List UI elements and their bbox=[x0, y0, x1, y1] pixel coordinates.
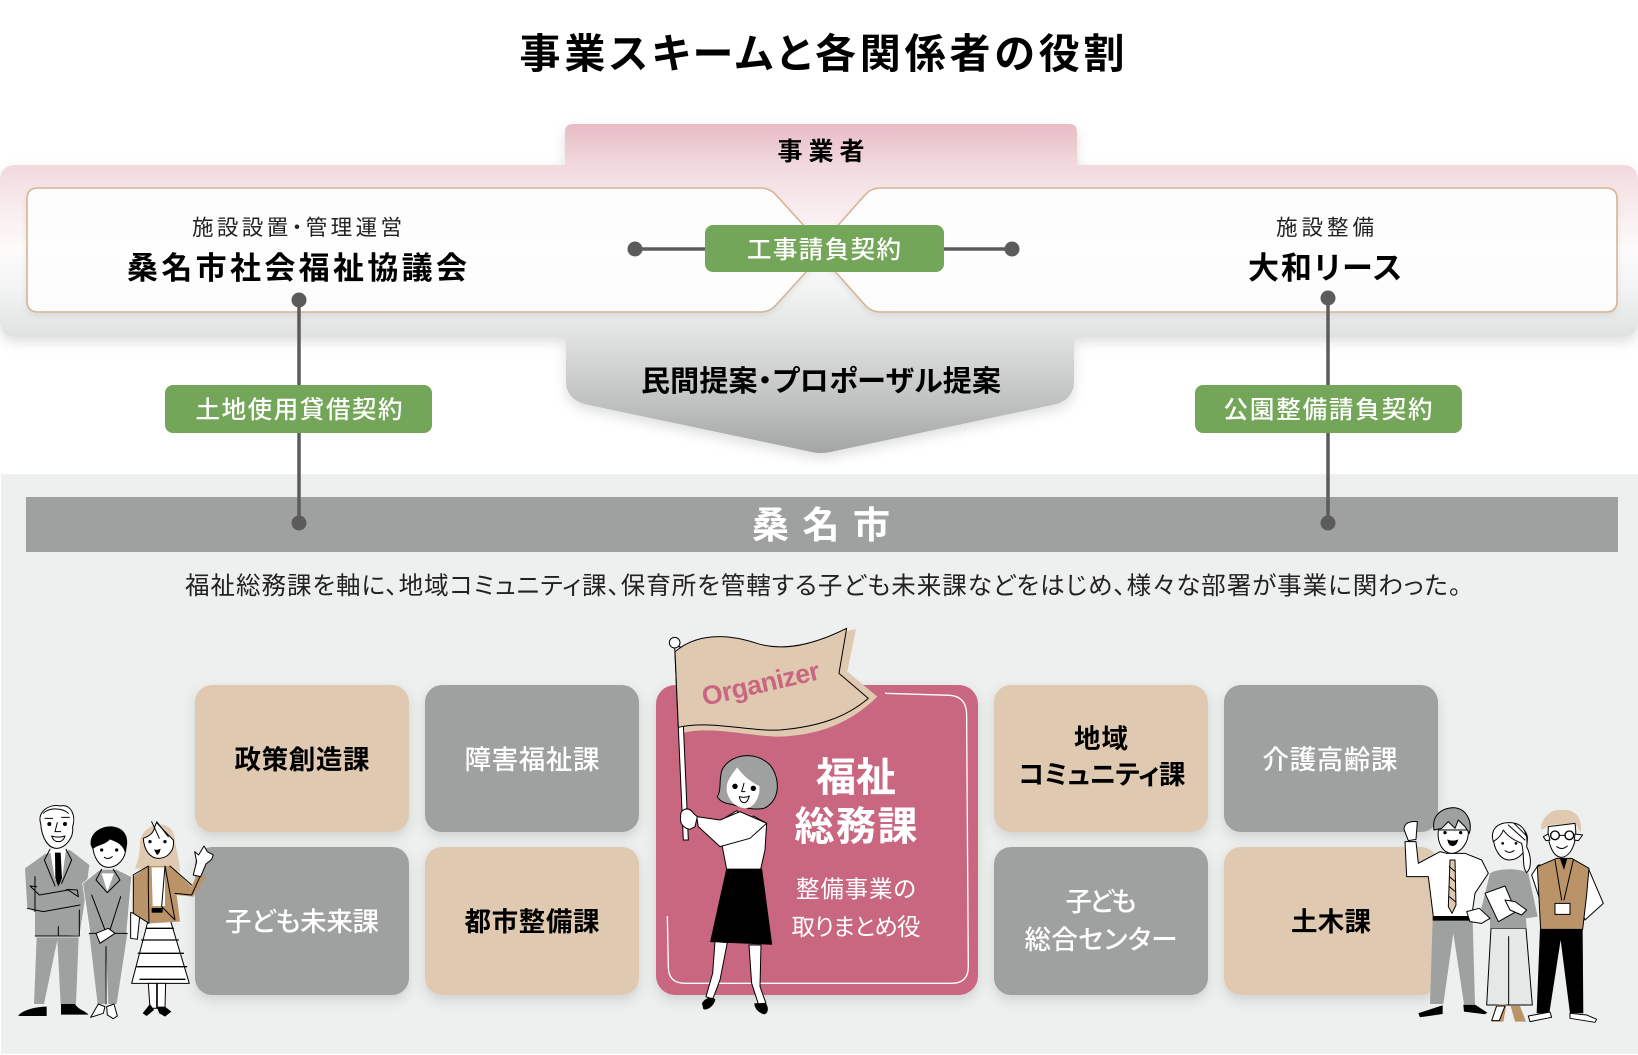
card: community: 地域 bbox=[1074, 724, 1128, 754]
connector: land lease contract bbox=[165, 292, 432, 530]
card: civil engineering: 土木課 bbox=[1291, 907, 1372, 937]
card: elderly care: 介護高齢課 bbox=[1262, 745, 1398, 775]
right woman bbox=[131, 822, 213, 1017]
card: community bbox=[994, 685, 1208, 832]
band background with tab and arrow bbox=[0, 124, 1638, 453]
man with vest bbox=[1528, 810, 1603, 1022]
panel: Kuwana city section bbox=[1, 474, 1638, 1054]
card subtitle line 1: 整備事業の bbox=[796, 876, 916, 902]
heading: operators: 事業者 bbox=[778, 138, 864, 166]
card: elderly care bbox=[1224, 685, 1438, 832]
flag text: Organizer bbox=[699, 656, 823, 712]
role label right: 施設整備 bbox=[1276, 216, 1374, 240]
city header bar bbox=[26, 497, 1618, 552]
panel: operators band bbox=[0, 124, 1638, 453]
card: general welfare affairs bbox=[656, 685, 978, 995]
contract label: 工事請負契約 bbox=[747, 236, 901, 264]
illustration: three staff on right bbox=[1404, 808, 1603, 1022]
card: disability welfare bbox=[425, 685, 639, 832]
contract label: 土地使用貸借契約 bbox=[196, 396, 402, 424]
card: children's centre bbox=[994, 847, 1208, 995]
illustration: organizer woman with flag bbox=[669, 628, 877, 1014]
card heading line 1: 福祉 bbox=[816, 756, 896, 800]
inner outline bbox=[667, 693, 968, 983]
middle woman bbox=[83, 826, 132, 1019]
card subtitle line 2: 取りまとめ役 bbox=[792, 914, 920, 940]
card: community: コミュニティ課 bbox=[1018, 760, 1186, 790]
card: disability welfare: 障害福祉課 bbox=[464, 745, 600, 775]
connector: construction contract bbox=[628, 225, 1020, 272]
woman with notebook bbox=[1467, 823, 1538, 1022]
connector: park contract bbox=[1195, 290, 1462, 530]
card: civil engineering bbox=[1224, 847, 1438, 995]
organisation name left: 桑名市社会福祉協議会 bbox=[127, 251, 467, 286]
card: children's future: 子ども未来課 bbox=[225, 907, 379, 937]
role label left: 施設設置・管理運営 bbox=[192, 216, 402, 240]
illustration: three staff on left bbox=[18, 805, 213, 1019]
proposal label: 民間提案・プロポーザル提案 bbox=[641, 365, 1001, 398]
man raising fist bbox=[1404, 808, 1488, 1017]
card: children's future bbox=[195, 847, 409, 995]
title: 事業スキームと各関係者の役割 bbox=[520, 31, 1124, 77]
card: policy creation bbox=[195, 685, 409, 832]
card: urban development: 都市整備課 bbox=[464, 907, 600, 937]
card: urban development bbox=[425, 847, 639, 995]
card: children's centre: 総合センター bbox=[1024, 925, 1178, 955]
box: welfare council bbox=[27, 188, 826, 312]
city name: 桑名市 bbox=[752, 505, 890, 546]
left man bbox=[18, 805, 89, 1016]
card: policy creation: 政策創造課 bbox=[234, 745, 370, 775]
organisation name right: 大和リース bbox=[1248, 251, 1402, 286]
contract label: 公園整備請負契約 bbox=[1224, 396, 1432, 424]
box: Yamato Lease bbox=[816, 188, 1617, 312]
card: children's centre: 子ども bbox=[1066, 887, 1136, 917]
description text: 福祉総務課を軸に、地域コミュニティ課、保育所を管轄する子ども未来課などをはじめ、様々な部署が事業に関わった。 bbox=[185, 572, 1461, 600]
card heading line 2: 総務課 bbox=[794, 805, 918, 849]
